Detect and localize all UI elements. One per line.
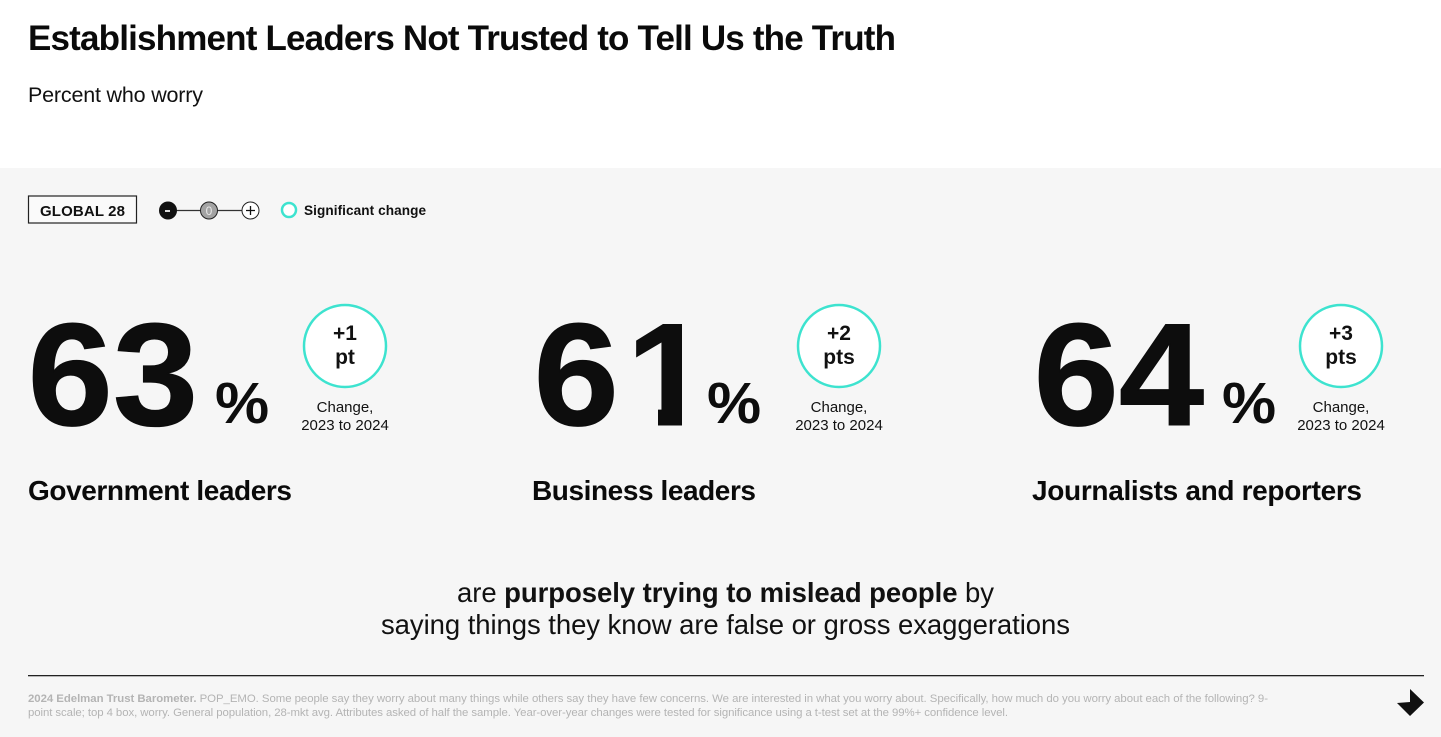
region tag [28, 196, 136, 223]
change badge [1300, 305, 1382, 387]
change caption [795, 399, 883, 434]
region tag: GLOBAL 28 [40, 203, 125, 220]
change scale icon: 0 [206, 204, 213, 218]
value 61: 61 [534, 292, 711, 456]
label: Journalists and reporters [1032, 475, 1362, 506]
percent sign: % [707, 370, 761, 436]
change caption: Change, [1313, 399, 1369, 416]
change badge [304, 305, 386, 387]
change badge: pts [823, 346, 855, 369]
significant change key: Significant change [304, 203, 426, 218]
change scale icon [159, 202, 259, 220]
change caption: Change, [317, 399, 373, 416]
label: Government leaders [28, 475, 292, 506]
change caption [1297, 399, 1385, 434]
change badge [798, 305, 880, 387]
change caption [301, 399, 389, 434]
stat: business leaders [532, 292, 883, 506]
statement text: are purposely trying to mislead people by [457, 577, 994, 608]
statement text [381, 577, 1070, 640]
percent sign: % [1222, 370, 1276, 436]
change caption: 2023 to 2024 [1297, 417, 1385, 434]
change caption: 2023 to 2024 [301, 417, 389, 434]
percent sign: % [215, 370, 269, 436]
value 63: 63 [28, 292, 198, 456]
change caption: 2023 to 2024 [795, 417, 883, 434]
stat: journalists and reporters [1032, 292, 1385, 506]
subtitle: Percent who worry [28, 83, 203, 107]
change badge: pts [1325, 346, 1357, 369]
footnote [28, 693, 1268, 719]
legend [28, 196, 426, 223]
footnote: 2024 Edelman Trust Barometer. POP_EMO. Some people say they worry about many things while others say they have few concerns. We are interested in what you worry about. Specifically, how much do you worry about each of the following? 9- [28, 693, 1268, 705]
change badge: +2 [827, 322, 851, 345]
icon: next arrow [1397, 689, 1424, 716]
title: Establishment Leaders Not Trusted to Tell Us the Truth [28, 19, 896, 58]
change badge: +1 [333, 322, 357, 345]
label: Business leaders [532, 475, 756, 506]
change badge: +3 [1329, 322, 1353, 345]
value 64: 64 [1034, 292, 1204, 456]
footnote: point scale; top 4 box, worry. General population, 28-mkt avg. Attributes asked of half the sample. Year-over-year changes were tested for significance using a t-test set at the 99%+ confidence level. [28, 707, 1008, 719]
stat: government leaders [28, 292, 389, 506]
change caption: Change, [811, 399, 867, 416]
change badge: pt [335, 346, 355, 369]
statement text: saying things they know are false or gross exaggerations [381, 609, 1070, 640]
